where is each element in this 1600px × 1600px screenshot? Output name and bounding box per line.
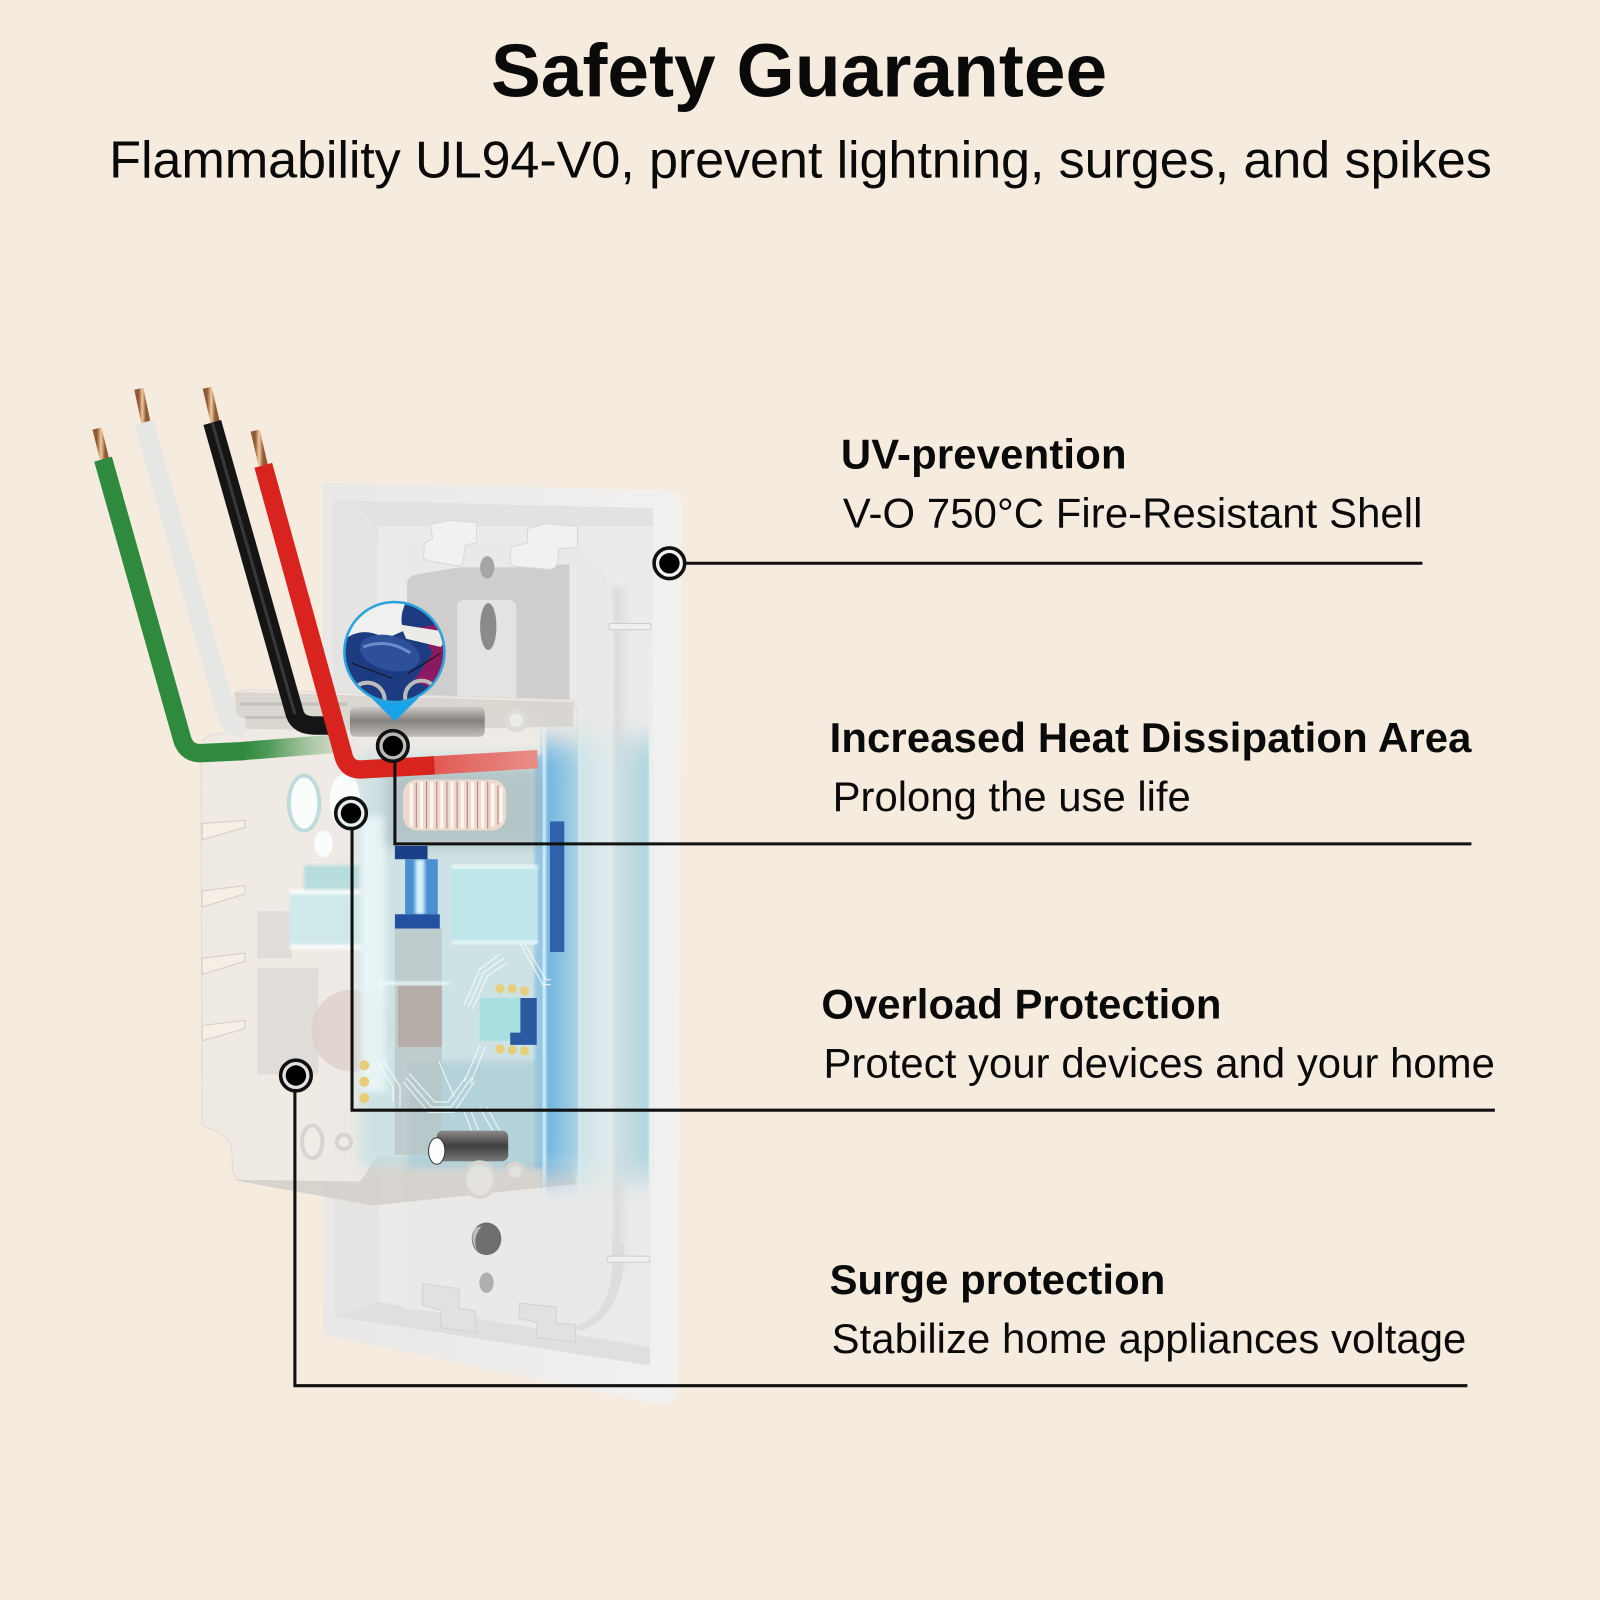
top tube (235, 692, 573, 737)
capacitor: horizontal cylinder (429, 1131, 508, 1164)
callout: Increased Heat Dissipation Area (378, 714, 1472, 844)
wall plate (322, 483, 682, 1405)
side pins (607, 623, 651, 1262)
translucent back housing (201, 690, 578, 1205)
circuit traces (378, 944, 551, 1138)
pink component (311, 990, 393, 1071)
main chip (452, 865, 538, 944)
wire: red (255, 431, 538, 769)
wire: black (207, 388, 332, 726)
heading: Increased Heat Dissipation Area (830, 714, 1472, 761)
description: V-O 750°C Fire-Resistant Shell (843, 490, 1422, 537)
housing lower lip (233, 1156, 576, 1205)
mounting posts (302, 1126, 523, 1197)
grey relay block (378, 929, 449, 1155)
marker dot (654, 548, 685, 579)
upper mounting slot (480, 603, 496, 650)
upper screw hole (480, 556, 494, 579)
wire: white (139, 389, 245, 729)
solder points (359, 984, 529, 1103)
marker dot (336, 798, 366, 829)
capacitors (287, 773, 360, 857)
small chip (480, 998, 537, 1045)
blue components (395, 821, 564, 952)
lower mounting hole (472, 1222, 501, 1255)
infographic: safety guarantee (92, 42, 1495, 1405)
heading: Overload Protection (821, 980, 1221, 1027)
glowing electronics interior (359, 739, 653, 1180)
subtitle: Flammability UL94-V0, prevent lightning, surges, and spikes (109, 132, 1492, 190)
magnified callout: coil detail (343, 601, 449, 721)
leader line (395, 761, 1471, 844)
marker dot (281, 1060, 311, 1091)
housing side fins (202, 820, 245, 1041)
description: Protect your devices and your home (823, 1040, 1495, 1087)
leader line (686, 562, 1422, 565)
housing side panels (257, 911, 318, 1074)
heading: Surge protection (830, 1256, 1165, 1303)
leader line (295, 1091, 1467, 1386)
description: Stabilize home appliances voltage (832, 1315, 1466, 1362)
raised switch body (403, 544, 634, 1331)
callout: Overload Protection (336, 798, 1495, 1110)
product: in-wall switch cutaway (97, 388, 682, 1405)
callout: UV-prevention (654, 430, 1422, 579)
upper clips (423, 520, 578, 569)
lower screw hole (479, 1272, 494, 1293)
callout: Surge protection (281, 1060, 1467, 1386)
description: Prolong the use life (833, 773, 1191, 820)
heading: UV-prevention (841, 430, 1127, 477)
leader line (352, 829, 1495, 1110)
marker dot (378, 731, 408, 761)
left glow block (290, 865, 361, 949)
wire: green (97, 429, 347, 753)
lower clips (422, 1284, 576, 1342)
toroid coil (386, 767, 539, 847)
title: Safety Guarantee (491, 28, 1107, 112)
